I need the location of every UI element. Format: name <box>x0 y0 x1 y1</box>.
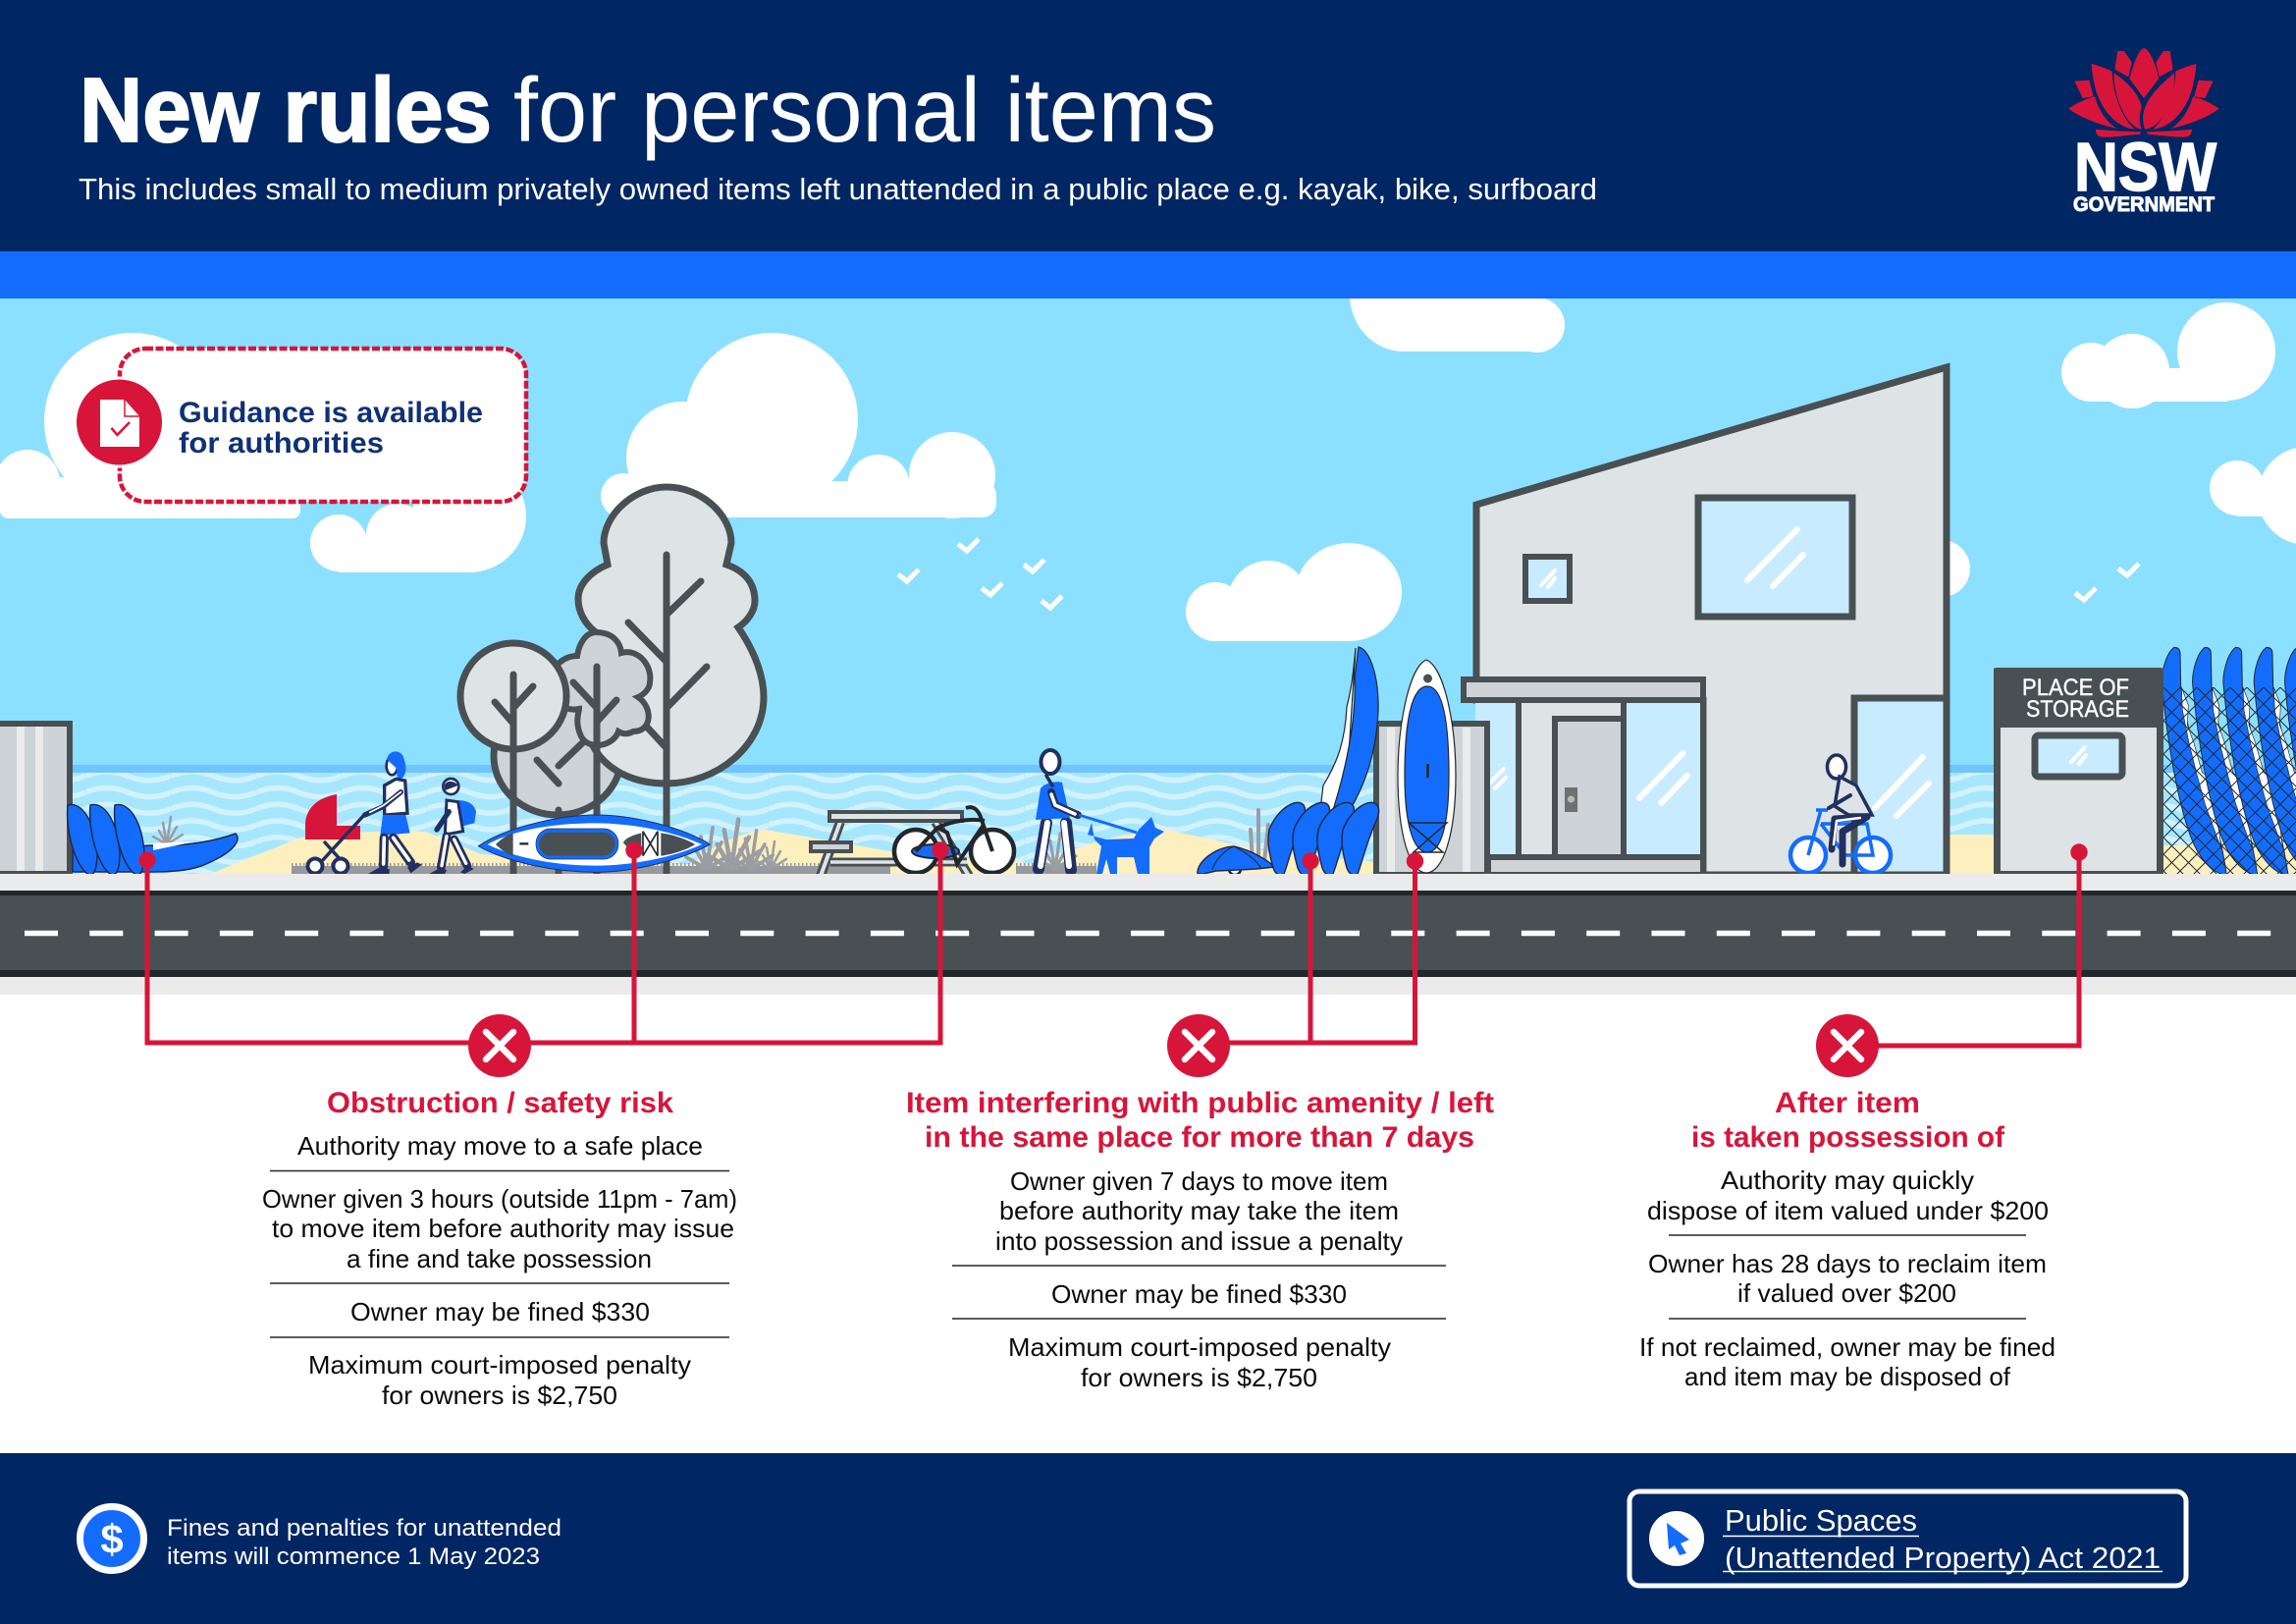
cloud top right <box>2061 302 2275 408</box>
link text <box>1723 1504 2163 1575</box>
rules text: dispose of item valued under $200 <box>1647 1196 2049 1225</box>
tent-like item <box>1198 846 1274 875</box>
icon: red cross <box>1167 1014 1230 1077</box>
icon: red cross <box>468 1014 531 1077</box>
lower right window <box>1854 698 1947 875</box>
heading: Item interfering with public amenity / left <box>906 1087 1494 1119</box>
connector lines: obstruction <box>138 841 949 1043</box>
icon: document in red circle <box>75 378 163 466</box>
rules text <box>262 1131 737 1410</box>
heading: is taken possession of <box>1691 1121 2005 1154</box>
child with backpack <box>429 779 476 874</box>
panel: public amenity <box>906 1014 1494 1392</box>
footer panel <box>0 1453 2296 1624</box>
rules text: if valued over $200 <box>1737 1278 1956 1308</box>
blue kayak left <box>73 834 238 872</box>
rules text: If not reclaimed, owner may be fined <box>1639 1332 2056 1362</box>
guidance text: for authorities <box>179 427 384 460</box>
rules text: for owners is $2,750 <box>1081 1363 1317 1392</box>
picnic table <box>811 812 969 876</box>
heading <box>906 1087 1494 1154</box>
link text: Public Spaces <box>1725 1504 1917 1538</box>
guidance text: Guidance is available <box>179 397 483 429</box>
rules text: Maximum court-imposed penalty <box>1008 1332 1391 1362</box>
cloud under guidance box <box>310 460 526 572</box>
cloud behind building <box>1913 540 1970 597</box>
left shed <box>0 724 70 874</box>
rules text: Owner given 7 days to move item <box>1010 1166 1388 1196</box>
rules text: for owners is $2,750 <box>382 1380 617 1410</box>
title <box>80 59 1216 161</box>
rules text: Maximum court-imposed penalty <box>308 1350 691 1380</box>
birds <box>898 539 2139 608</box>
icon: red cross <box>1816 1014 1879 1077</box>
connector lines: public amenity <box>1199 852 1423 1043</box>
rules text <box>1639 1165 2056 1391</box>
panel: after possession <box>1639 1014 2056 1391</box>
cloud centre right <box>1186 543 1402 641</box>
rules text: Owner given 3 hours (outside 11pm - 7am) <box>262 1184 737 1214</box>
guidance text <box>179 397 483 460</box>
rules text: to move item before authority may issue <box>272 1214 734 1243</box>
panel: obstruction / safety risk <box>262 1014 737 1410</box>
logo: NSW Government: GOVERNMENT <box>2073 192 2215 216</box>
icon: cursor <box>1649 1511 1704 1566</box>
rules text: Authority may move to a safe place <box>297 1131 703 1161</box>
title: New rules <box>80 59 492 161</box>
fence with surfboards <box>2162 647 2296 875</box>
small window <box>1525 557 1570 601</box>
person walking dog <box>1036 750 1164 874</box>
kiosk label: PLACE OF <box>2022 675 2129 701</box>
cloud centre left <box>601 333 996 518</box>
rules text: a fine and take possession <box>347 1244 652 1273</box>
title: for personal items <box>513 59 1216 161</box>
header panel <box>0 0 2296 298</box>
sand dunes <box>210 830 2296 877</box>
rules text: Owner may be fined $330 <box>1051 1279 1347 1309</box>
commencement text: items will commence 1 May 2023 <box>167 1543 540 1570</box>
leash <box>1079 815 1137 833</box>
upper window <box>1698 498 1852 617</box>
commencement text: Fines and penalties for unattended <box>167 1515 561 1542</box>
footpath and road <box>0 874 2296 995</box>
callout: guidance available <box>75 349 526 502</box>
commencement text <box>167 1515 561 1570</box>
sea with waves <box>0 765 2296 877</box>
bicycle at table <box>894 807 1014 873</box>
kiosk label: STORAGE <box>2026 696 2129 723</box>
scene: sky background <box>0 298 2296 877</box>
cloud top <box>1350 238 1565 352</box>
dog <box>1088 817 1164 874</box>
heading <box>1691 1087 2005 1154</box>
bodyboards left <box>68 805 144 875</box>
rules text: Owner may be fined $330 <box>350 1297 650 1326</box>
heading: After item <box>1775 1087 1920 1119</box>
subtitle: This includes small to medium privately owned items left unattended in a public place e.g. kayak, bike, surfboard <box>79 172 1597 206</box>
kayak on ground <box>478 815 710 872</box>
icon: dollar coin <box>80 1506 143 1571</box>
rules text: Authority may quickly <box>1721 1165 1974 1195</box>
waratah <box>2068 48 2219 137</box>
icon: dollar coin: $ <box>100 1516 124 1562</box>
link text: (Unattended Property) Act 2021 <box>1725 1542 2161 1575</box>
rules text <box>952 1166 1446 1392</box>
tree: front round <box>460 643 566 876</box>
rules text: into possession and issue a penalty <box>995 1226 1403 1256</box>
ground grass strip <box>153 810 1268 874</box>
shed by building <box>1376 724 1487 875</box>
rules text: before authority may take the item <box>999 1196 1399 1225</box>
link button: Act <box>1629 1491 2186 1586</box>
rules text: Owner has 28 days to reclaim item <box>1648 1249 2047 1278</box>
logo: NSW Government <box>2068 48 2219 216</box>
connector lines: possession <box>1847 843 2088 1046</box>
place of storage kiosk <box>1994 668 2163 874</box>
stand up paddle board <box>1398 660 1456 873</box>
cyclist <box>1790 755 1891 873</box>
bodyboards right <box>1268 802 1379 875</box>
logo: NSW Government: NSW <box>2074 129 2216 205</box>
building <box>1464 367 1947 877</box>
tree: back round <box>494 697 621 876</box>
heading: Obstruction / safety risk <box>327 1087 673 1119</box>
cloud behind guidance box <box>0 333 300 518</box>
tree: big <box>578 487 764 876</box>
heading: in the same place for more than 7 days <box>925 1121 1474 1154</box>
white content area <box>0 995 2296 1453</box>
rules text: and item may be disposed of <box>1684 1362 2011 1391</box>
woman with stroller <box>305 751 422 874</box>
tall surfboard <box>1320 647 1378 815</box>
blue band <box>0 251 2296 298</box>
cloud far right <box>2210 447 2296 545</box>
tree: scalloped <box>551 632 650 876</box>
stroller <box>305 794 364 874</box>
kiosk label <box>2022 675 2129 723</box>
